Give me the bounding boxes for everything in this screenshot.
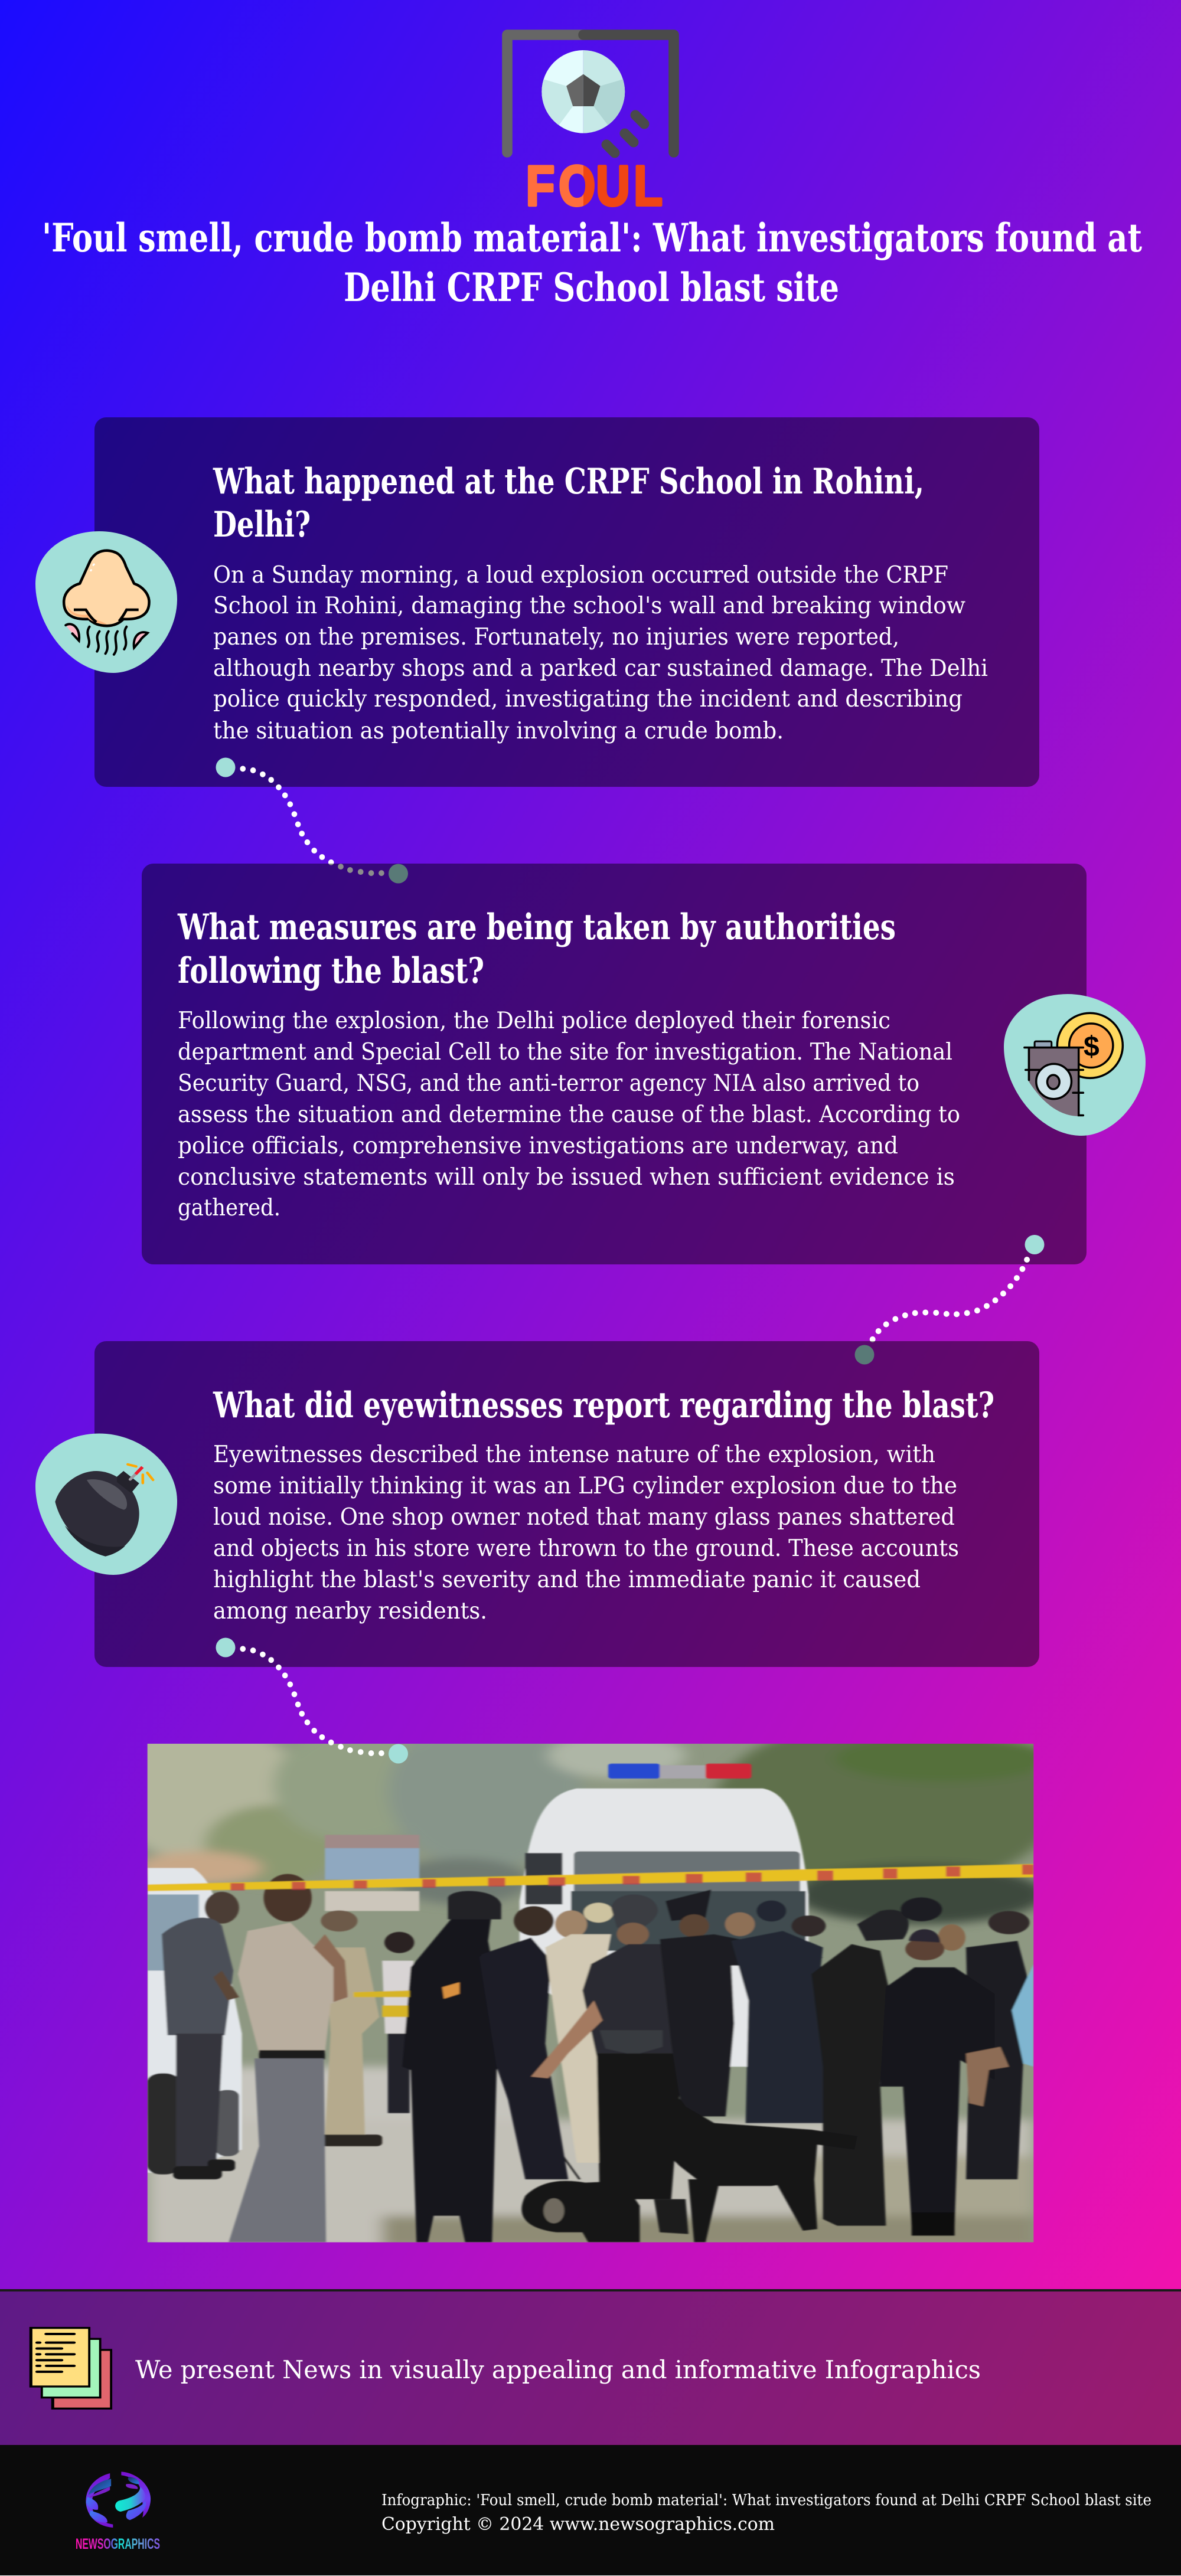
heading: Delhi? — [213, 504, 311, 545]
body text — [213, 1441, 959, 1624]
copyright: Copyright © 2024 www.newsographics.com — [381, 2514, 775, 2535]
heading: following the blast? — [178, 950, 484, 992]
man in beige shirt on phone — [263, 1874, 312, 1921]
body text: On a Sunday morning, a loud explosion occurred outside the CRPF — [213, 562, 948, 589]
heading: What happened at the CRPF School in Rohini, — [213, 461, 924, 502]
signboards — [325, 1848, 419, 1879]
light bar — [608, 1764, 660, 1779]
arms and blue jacket — [966, 2047, 1009, 2107]
central commando — [611, 1894, 658, 1931]
body text: gathered. — [178, 1195, 280, 1221]
heading — [213, 461, 924, 545]
man in black — [514, 1906, 554, 1936]
goal frame — [507, 35, 674, 152]
motion dashes — [606, 115, 644, 153]
body text: although nearby shops and a parked car sustained damage. The Delhi — [213, 655, 988, 682]
tagline text: We present News in visually appealing and informative Infographics — [135, 2355, 981, 2384]
title: Delhi CRPF School blast site — [344, 264, 839, 310]
body text: Following the explosion, the Delhi police deployed their forensic — [178, 1008, 890, 1034]
photo: security personnel and dogs at blast site — [148, 1744, 1033, 2242]
connector: dotted path 1 — [216, 758, 408, 883]
heading — [177, 907, 896, 992]
soccer ball — [541, 50, 625, 133]
body text: assess the situation and determine the cause of the blast. According to — [178, 1101, 960, 1128]
background foliage — [148, 1744, 1033, 2242]
connector: dotted path 3 — [216, 1637, 408, 1764]
body text: loud noise. One shop owner noted that many glass panes shattered — [213, 1504, 955, 1531]
panel: measures by authorities — [142, 864, 1146, 1264]
icon: nose with smell — [35, 531, 177, 673]
heading: What measures are being taken by authorities — [177, 907, 896, 948]
commando with dog leash — [448, 1891, 501, 1919]
body text: the situation as potentially involving a crude bomb. — [213, 718, 784, 744]
body text: department and Special Cell to the site for investigation. The National — [178, 1039, 952, 1065]
panel: eyewitness reports — [35, 1341, 1039, 1667]
khaki officers — [555, 1910, 587, 1938]
body text: police officials, comprehensive investigations are underway, and — [178, 1133, 898, 1159]
man in grey shirt — [205, 1892, 239, 1924]
icon: oil barrel and coin — [1004, 994, 1146, 1136]
footer caption: Infographic: 'Foul smell, crude bomb material': What investigators found at Delhi CRPF School blast site — [381, 2492, 1151, 2509]
icon: bomb — [35, 1433, 177, 1575]
logo icon: soccer goal and ball with FOUL — [507, 35, 674, 217]
body text: some initially thinking it was an LPG cylinder explosion due to the — [213, 1473, 957, 1499]
connector: dotted path 2 — [855, 1235, 1044, 1365]
icon: stacked documents — [30, 2327, 112, 2410]
turbaned commando — [665, 1889, 712, 1921]
dollar sign: $ — [1084, 1031, 1100, 1063]
body text: School in Rohini, damaging the school's wall and breaking window — [213, 593, 965, 619]
body text: Security Guard, NSG, and the anti-terror agency NIA also arrived to — [178, 1070, 919, 1097]
body text — [178, 1008, 960, 1221]
tagline band — [0, 2289, 1181, 2445]
tape — [148, 1864, 1033, 1891]
panel: what happened — [35, 417, 1039, 787]
white car — [148, 1868, 242, 2173]
body text: police quickly responded, investigating the incident and describing — [213, 686, 963, 712]
body text — [213, 562, 988, 744]
body text: and objects in his store were thrown to the ground. These accounts — [213, 1535, 959, 1562]
footer — [0, 2445, 1181, 2575]
right group of commandos — [756, 1900, 787, 1921]
dogs — [642, 2091, 857, 2186]
body text: highlight the blast's severity and the immediate panic it caused — [213, 1567, 921, 1593]
title — [42, 215, 1142, 310]
police van — [520, 1789, 808, 2067]
logo wordmark: NEWSOGRAPHICS — [76, 2536, 160, 2552]
body text: Eyewitnesses described the intense nature of the explosion, with — [213, 1441, 935, 1468]
FOUL wordmark: FOUL — [526, 153, 663, 217]
logo: Newsographics globe — [86, 2472, 151, 2528]
body text: panes on the premises. Fortunately, no injuries were reported, — [213, 624, 899, 650]
body text: conclusive statements will only be issued when sufficient evidence is — [178, 1164, 955, 1191]
khaki officer and woman — [321, 1910, 357, 1931]
body text: among nearby residents. — [213, 1598, 487, 1624]
